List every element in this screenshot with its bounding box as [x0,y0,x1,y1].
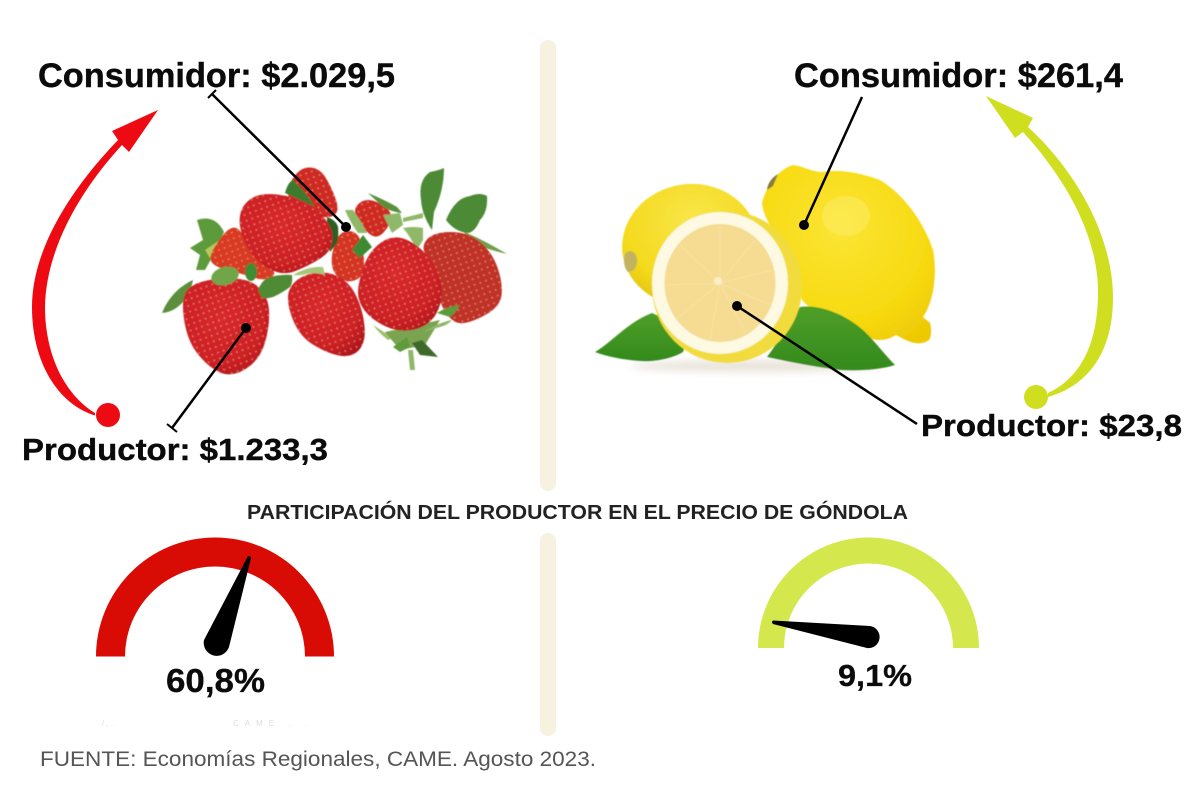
source note: FUENTE: Economías Regionales, CAME. Agosto 2023. [40,748,596,771]
faint residual text: CAME . . [233,719,307,728]
callout: consumer lemon price: Consumidor: $261,4 [794,57,1123,95]
callout: producer lemon price: Productor: $23,8 [921,408,1182,443]
callout: producer strawberry price [22,323,328,467]
divider: bottom center [540,533,556,736]
heading: producer share: PARTICIPACIÓN DEL PRODUCTOR EN EL PRECIO DE GÓNDOLA [247,500,908,524]
gauge: strawberry 60,8%: 60,8% [166,662,265,699]
callout: consumer strawberry price [38,57,395,232]
gauge: lemon 9,1% [758,538,979,693]
gauge: strawberry 60,8% [96,538,334,699]
callout: producer lemon price [732,301,1182,443]
callout: consumer lemon price [794,57,1123,230]
panel: lemons [595,57,1182,443]
faint residual text: / . . [102,719,113,728]
callout: producer strawberry price: Productor: $1.233,3 [22,432,328,467]
arrow: lime, producer to consumer [986,96,1113,409]
arrow: red, producer to consumer [32,110,158,427]
callout: consumer strawberry price: Consumidor: $2.029,5 [38,57,395,95]
faint residual text [102,719,307,728]
gauge: lemon 9,1%: 9,1% [838,658,912,693]
image: lemons [595,165,935,372]
panel: strawberries [22,57,507,467]
image: strawberries [162,167,507,374]
divider: top center [540,40,556,491]
